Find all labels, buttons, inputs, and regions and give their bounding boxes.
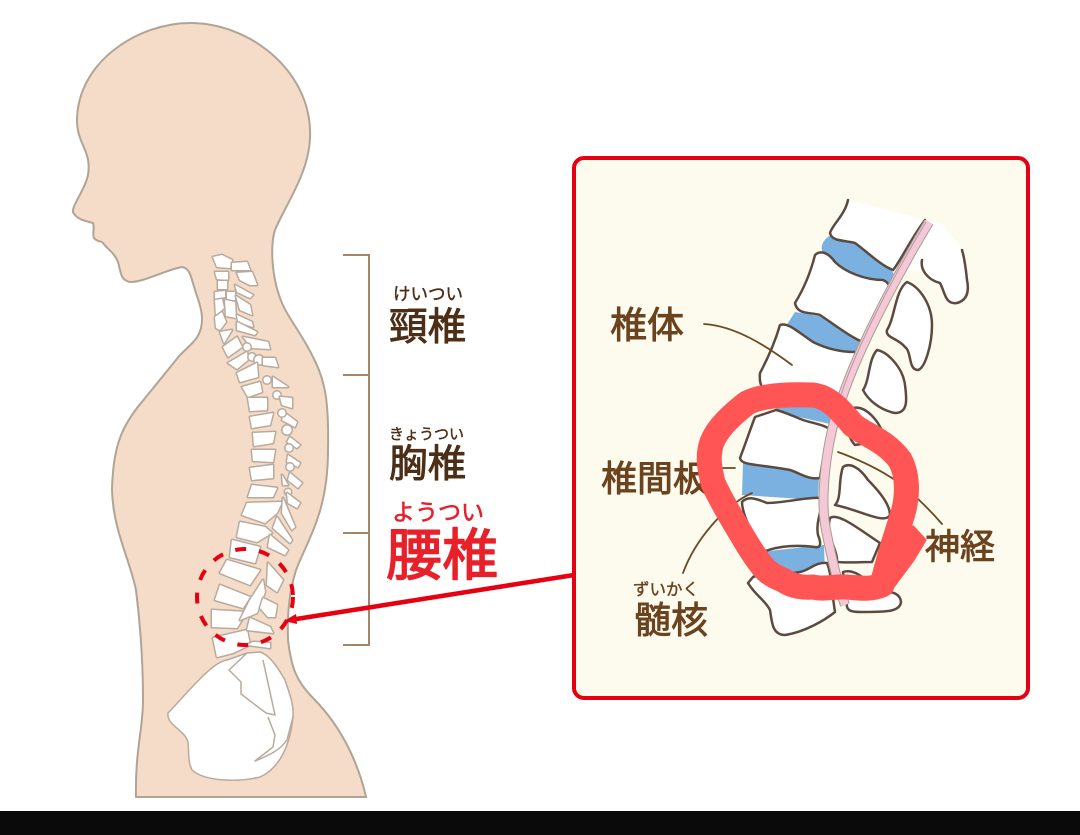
label: nucleus pulposus: ずいかく: [633, 580, 699, 599]
label: thoracic: きょうつい: [389, 426, 464, 443]
label: vertebral body: 椎体: [610, 305, 684, 346]
white area behind upper bones: [830, 200, 963, 290]
label: nerve: 神経: [925, 528, 995, 567]
label: cervical: けいつい: [393, 284, 463, 304]
detail panel: [574, 158, 1028, 698]
vertebrae: [740, 200, 968, 635]
label: lumbar: 腰椎: [386, 524, 498, 587]
bottom black bar: [0, 811, 1080, 835]
label: nucleus pulposus: 髄核: [634, 600, 708, 641]
label: thoracic: 胸椎: [389, 443, 466, 486]
bracket: [343, 255, 369, 645]
dashed highlight circle: [197, 549, 293, 645]
body silhouette: [73, 23, 366, 797]
leader lines: [683, 324, 942, 573]
label: nucleus pulposus: [633, 580, 708, 641]
label: cervical: [389, 284, 466, 349]
label: cervical: 頸椎: [389, 306, 466, 349]
label: intervertebral disc: 椎間板: [601, 458, 709, 499]
spinal cord: [824, 222, 929, 605]
pelvis and sacrum: [168, 652, 293, 780]
red connector arrow: [284, 575, 574, 624]
hand-drawn red circle: [709, 395, 925, 588]
label: lumbar: ようつい: [392, 499, 484, 525]
spine skeleton: [212, 255, 302, 657]
intervertebral discs: [742, 236, 894, 585]
